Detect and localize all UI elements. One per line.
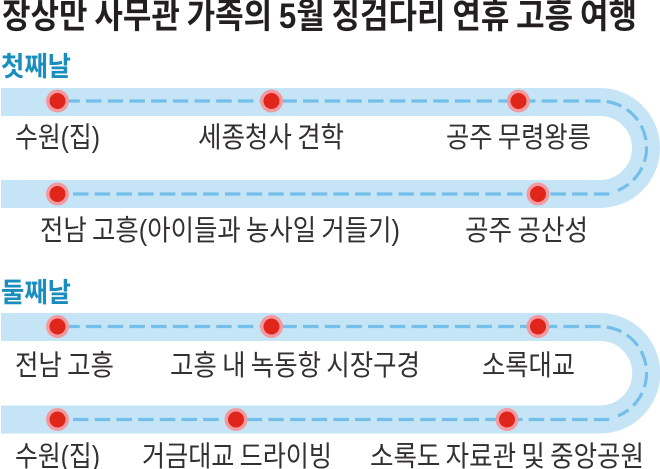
panel: day two route — [1, 278, 647, 469]
stop: Sorok bridge: 소록대교 — [482, 350, 575, 382]
stop: Sorok bridge — [482, 315, 575, 382]
stop: Sorokdo museum and central park — [370, 408, 644, 469]
stop: Suwon home: 수원(집) — [15, 122, 100, 154]
stop: Goheung — [15, 315, 114, 382]
stop: Gongsanseong — [465, 182, 588, 247]
stop: Suwon home — [15, 90, 100, 154]
stop: Goheung farm work — [40, 182, 400, 247]
heading: day two: 둘째날 — [1, 278, 71, 308]
route track: day one — [1, 102, 646, 194]
stop: Nokdong port market: 고흥 내 녹동항 시장구경 — [170, 350, 420, 382]
stop: Muryeong royal tomb: 공주 무령왕릉 — [446, 122, 591, 154]
stop: Sejong government complex: 세종청사 견학 — [198, 122, 344, 154]
panel: day one route — [1, 52, 647, 247]
stop: Goheung: 전남 고흥 — [15, 350, 114, 382]
stop: Geogeum bridge drive — [142, 408, 332, 469]
stop: Suwon home return — [15, 408, 100, 469]
route dashes: day one — [51, 101, 647, 194]
stop: Muryeong royal tomb — [446, 90, 591, 154]
stop: Gongsanseong: 공주 공산성 — [465, 215, 588, 247]
route dashes: day two — [51, 326, 647, 420]
stop: Goheung farm work: 전남 고흥(아이들과 농사일 거들기) — [40, 215, 400, 247]
heading: day one: 첫째날 — [1, 52, 71, 82]
stop: Nokdong port market — [170, 315, 420, 382]
stop: Sejong government complex — [198, 90, 344, 154]
route track: day two — [1, 327, 646, 420]
